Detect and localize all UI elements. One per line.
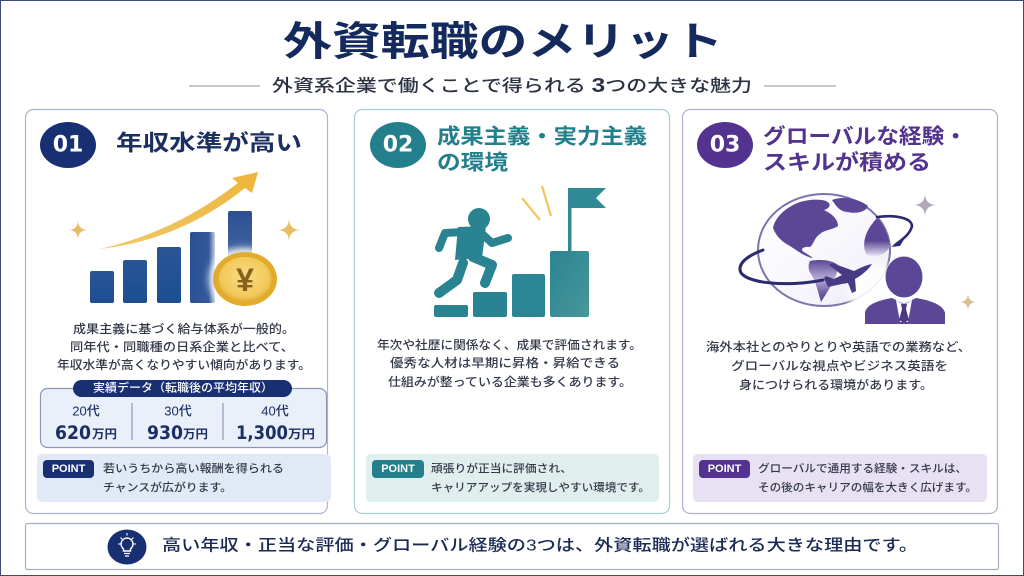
point box 02: 頑張りが正当に評価され、 bbox=[431, 461, 572, 475]
conclusion text: 高い年収・正当な評価・グローバル経験の3つは、外資転職が選ばれる大きな理由です。 bbox=[162, 536, 918, 554]
illustration: rising bars, arrow and yen coin bbox=[68, 172, 301, 310]
description 03: 身につけられる環境があります。 bbox=[739, 377, 933, 392]
description 01: 年収水準が高くなりやすい傾向があります。 bbox=[57, 357, 311, 372]
point box 01: チャンスが広がります。 bbox=[103, 480, 232, 494]
badge 01 bbox=[40, 122, 96, 168]
illustration: person climbing steps to flag bbox=[434, 186, 606, 317]
subtitle with rules: 外資系企業で働くことで得られる 3つの大きな魅力 bbox=[272, 75, 752, 97]
data table: average annual income: 930 bbox=[147, 422, 183, 444]
point box 03: グローバルで通用する経験・スキルは、 bbox=[758, 461, 967, 475]
badge 03: 03 bbox=[710, 132, 740, 158]
data table: average annual income bbox=[40, 380, 326, 448]
data table: average annual income: 実績データ（転職後の平均年収） bbox=[93, 380, 273, 394]
point box 03: その後のキャリアの幅を大きく広げます。 bbox=[758, 480, 977, 494]
illustration: globe, plane and businessperson bbox=[740, 193, 977, 324]
data table: average annual income: 620 bbox=[55, 422, 91, 444]
point box 01: POINT bbox=[52, 463, 86, 475]
panel: 03 global experience bbox=[682, 110, 998, 514]
description 03: グローバルな視点やビジネス英語を bbox=[731, 358, 948, 373]
illustration: rising bars, arrow and yen coin: ¥ bbox=[236, 262, 254, 298]
heading 01: 年収水準が高い bbox=[116, 130, 302, 156]
badge 02 bbox=[370, 122, 426, 168]
icon: light bulb bbox=[108, 530, 146, 564]
description 02: 優秀な人材は早期に昇格・昇給できる bbox=[390, 355, 620, 370]
data table: average annual income: 30代 bbox=[164, 404, 192, 418]
description 02: 年次や社歴に関係なく、成果で評価されます。 bbox=[377, 337, 642, 352]
description 01: 同年代・同職種の日系企業と比べて、 bbox=[70, 339, 294, 354]
data table: average annual income: 1,300 bbox=[236, 422, 288, 444]
point box 02: POINT bbox=[381, 463, 415, 475]
badge 01: 01 bbox=[53, 132, 83, 158]
description 01 bbox=[57, 321, 311, 372]
panel: 02 merit-based bbox=[354, 110, 670, 514]
point box 02: キャリアアップを実現しやすい環境です。 bbox=[431, 480, 650, 494]
heading 02 bbox=[437, 124, 647, 174]
point box 01 bbox=[37, 454, 331, 502]
heading 02: の環境 bbox=[437, 152, 508, 174]
description 03: 海外本社とのやりとりや英語での業務など、 bbox=[706, 339, 971, 354]
heading 03: スキルが積める bbox=[763, 150, 931, 174]
heading 03 bbox=[763, 124, 967, 174]
data table: average annual income: 40代 bbox=[261, 404, 289, 418]
description 01: 成果主義に基づく給与体系が一般的。 bbox=[73, 321, 295, 336]
description 02 bbox=[377, 337, 642, 389]
data table: average annual income: 万円 bbox=[92, 427, 117, 441]
point box 03: POINT bbox=[708, 463, 742, 475]
point box 03 bbox=[693, 454, 987, 502]
description 03 bbox=[706, 339, 971, 392]
badge 03 bbox=[697, 122, 753, 168]
point box 01: 若いうちから高い報酬を得られる bbox=[103, 461, 284, 475]
data table: average annual income: 万円 bbox=[288, 427, 315, 441]
heading 02: 成果主義・実力主義 bbox=[437, 124, 647, 148]
badge 02: 02 bbox=[383, 132, 413, 158]
heading 03: グローバルな経験・ bbox=[763, 124, 967, 148]
point box 02 bbox=[366, 454, 659, 502]
data table: average annual income: 万円 bbox=[183, 427, 208, 441]
conclusion banner bbox=[26, 524, 998, 570]
description 02: 仕組みが整っている企業も多くあります。 bbox=[388, 374, 632, 389]
data table: average annual income: 20代 bbox=[72, 404, 100, 418]
title: 外資転職のメリット bbox=[283, 20, 723, 64]
panel: 01 high salary bbox=[26, 110, 331, 514]
